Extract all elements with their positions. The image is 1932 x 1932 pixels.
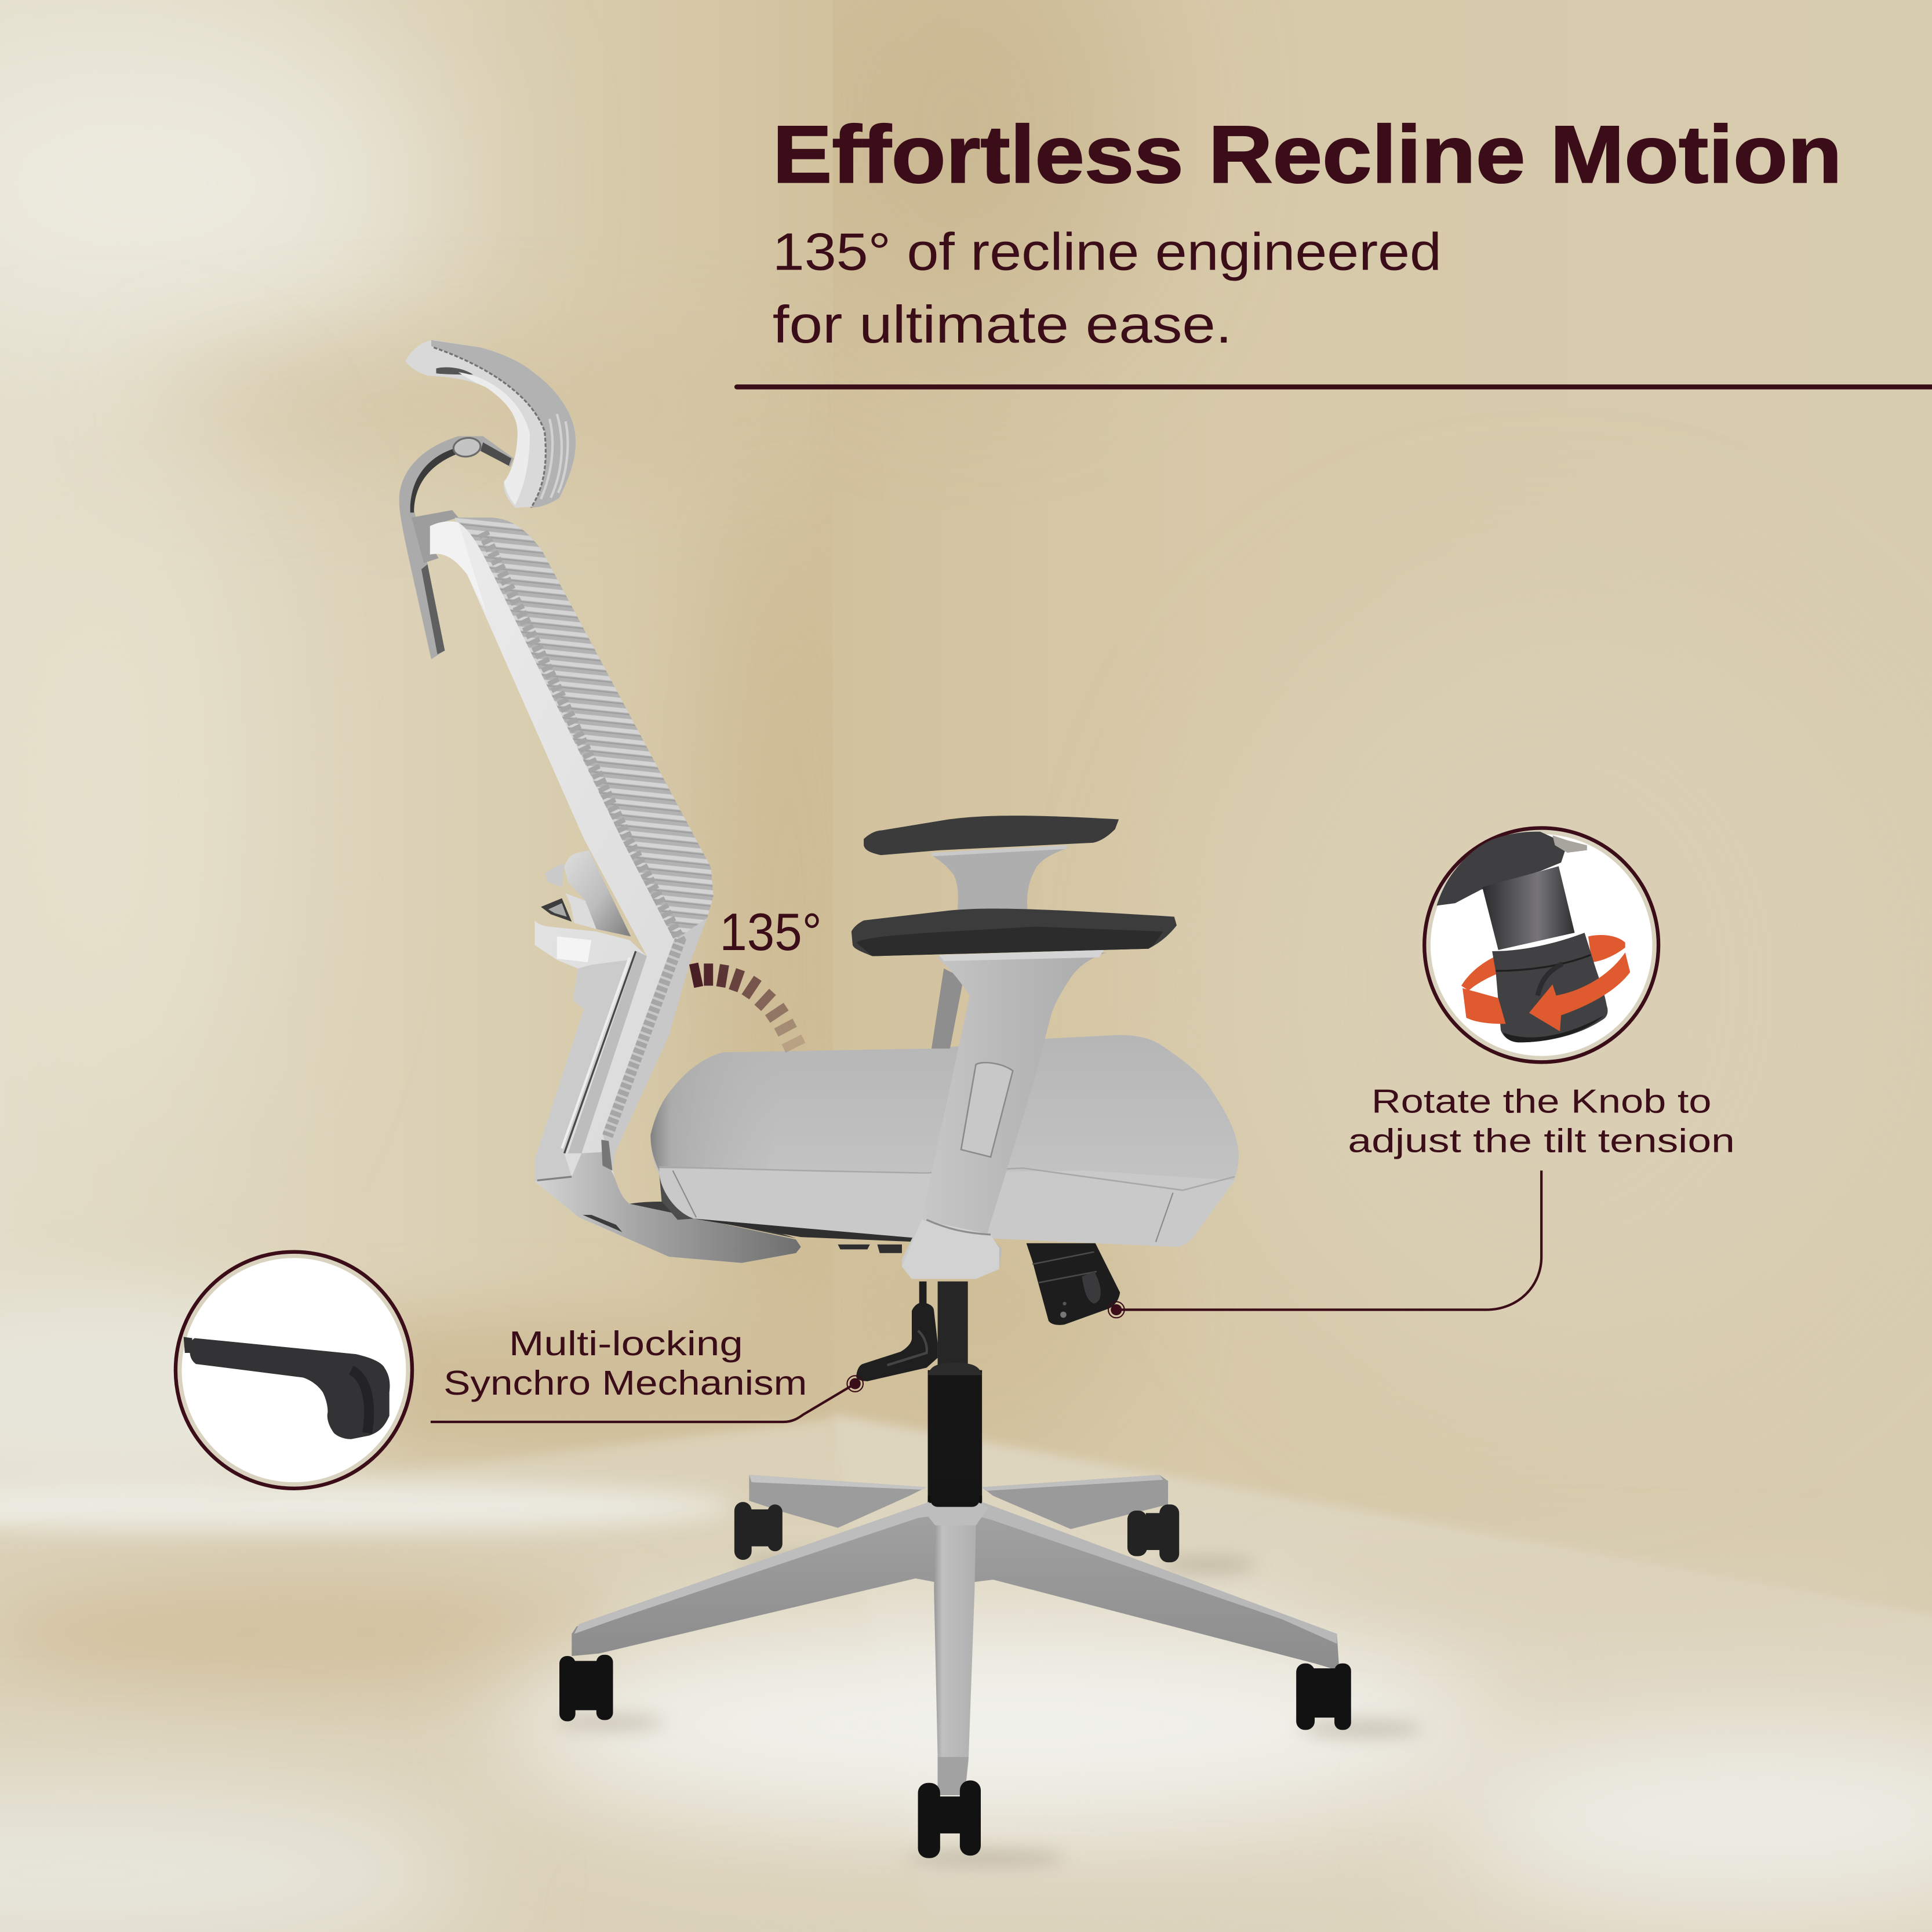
handle grip [190,1338,390,1439]
five-star base [572,1475,1340,1795]
recline angle arc [694,963,803,1049]
inset: synchro handle close-up [176,1252,412,1489]
rear armrest [864,816,1119,1049]
left wall [0,0,863,1602]
caster: rear left [734,1502,783,1560]
handle tip [184,1337,192,1353]
subtitle: 135° of recline engineered [773,223,1442,282]
orange rotation ring rear [1461,935,1625,991]
lumbar pad arm [566,893,596,929]
lumbar support [541,850,631,936]
headrest support tube [399,436,514,659]
orange rotation arrow [1529,952,1630,1031]
mesh lower fade [601,918,707,1170]
seat cushion [650,1035,1239,1253]
label: synchro mechanism [443,1324,807,1402]
back mesh [454,518,714,1170]
title: Effortless Recline Motion [773,109,1842,200]
frame lower swing arm [535,1152,801,1263]
frame top highlight [430,522,487,614]
caster: front right [1296,1664,1351,1730]
lumbar tab [545,864,565,887]
headrest [405,340,576,508]
inset: tilt tension knob close-up [1424,828,1658,1062]
casters [559,1502,1351,1858]
callout line: knob [1116,1170,1541,1310]
mesh seam band [483,532,680,1136]
label: rotate the knob [1348,1083,1735,1159]
lower outer frame [535,960,630,1181]
mid frame band [568,951,647,1154]
recline angle label: 135° [719,903,822,962]
base front left leg [572,1506,936,1656]
knob body [1492,933,1607,1042]
back top bracket [412,510,459,563]
callout dot: knob [1108,1302,1125,1318]
chair [399,340,1351,1858]
knob cylinder [1482,866,1575,950]
base front right leg [973,1506,1340,1671]
silver hinge in inset [1552,835,1587,853]
front armrest [852,908,1177,1279]
lumbar pad [565,850,631,936]
label: rotate the knob: adjust the tilt tension [1348,1122,1735,1159]
label: synchro mechanism: Synchro Mechanism [443,1363,807,1402]
right wall [833,0,1932,1464]
back frame [430,522,801,1263]
label: rotate the knob: Rotate the Knob to [1371,1083,1712,1120]
caster: rear right [1127,1504,1179,1562]
base rear legs [749,1475,926,1528]
seat mechanism in inset [1436,832,1567,905]
subtitle [773,223,1442,354]
lumbar ring highlight [557,936,591,962]
gas lift column [928,1282,982,1510]
floor [0,1414,1932,1932]
subtitle: for ultimate ease. [773,295,1232,354]
label: synchro mechanism: Multi-locking [509,1324,743,1363]
orange ring front [1462,988,1506,1024]
heading divider [737,385,1932,388]
caster: centre [918,1781,981,1858]
tilt tension knob [1027,1243,1120,1325]
base centre leg [934,1516,976,1795]
caster: front left [559,1655,613,1722]
callout dot: synchro [847,1376,863,1392]
caster shadows [555,1555,1423,1866]
synchro lever [856,1282,938,1381]
callout line: synchro [431,1384,855,1422]
lumbar hinge shadow [541,898,572,922]
